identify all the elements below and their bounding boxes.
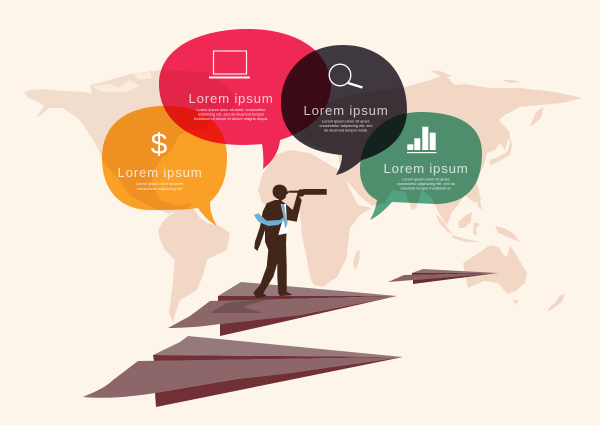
body text: orange bubble: consectetur adipiscing elit.	[137, 186, 183, 191]
icon: magnifier	[329, 64, 362, 88]
body text: red bubble: adipiscing elit, sed do eiusmod tempor	[198, 112, 265, 116]
green bubble content	[383, 127, 469, 190]
orange bubble content	[117, 128, 203, 191]
telescope	[288, 189, 327, 195]
japan and sakhalin	[490, 106, 544, 165]
red bubble content	[188, 51, 274, 121]
indonesia and philippines	[435, 196, 520, 242]
body text: orange bubble	[136, 181, 184, 191]
north america	[24, 70, 238, 214]
body text: orange bubble: Lorem ipsum dolor sit amet,	[136, 181, 184, 186]
body text: dark bubble: do eiusmod tempor incidi.	[324, 128, 368, 132]
hand	[297, 189, 305, 197]
body text: green bubble: consectetur adipiscing elit, sed do	[397, 181, 455, 186]
body text: red bubble: Lorem ipsum dolor sit amet, consectetur	[196, 107, 266, 112]
small paper plane	[388, 269, 498, 284]
bubble: red	[159, 29, 331, 169]
heading: orange bubble: Lorem ipsum	[117, 165, 203, 180]
bubble: dark	[281, 45, 407, 175]
man body	[253, 194, 302, 298]
medium paper plane	[168, 282, 397, 336]
body text: green bubble: eiusmod tempor incididunt ut.	[401, 186, 451, 190]
madagascar	[353, 250, 360, 270]
australia	[463, 245, 527, 294]
dark bubble content	[303, 64, 389, 132]
body text: red bubble	[194, 107, 268, 121]
new zealand and tasmania	[513, 294, 565, 311]
bubble: orange	[102, 106, 227, 226]
head	[273, 185, 288, 201]
south america	[158, 208, 230, 323]
body text: dark bubble	[320, 118, 372, 132]
africa	[258, 150, 372, 287]
white shirt	[278, 204, 287, 235]
bubble: green	[360, 112, 482, 220]
businessman with telescope	[253, 185, 327, 298]
blue scarf	[254, 213, 285, 226]
canadian arctic islands	[92, 72, 152, 92]
body text: dark bubble: Lorem ipsum dolor sit amet,	[322, 118, 370, 124]
blue tie	[281, 204, 287, 229]
heading: red bubble: Lorem ipsum	[188, 91, 274, 106]
icon: laptop	[209, 51, 250, 78]
body text: dark bubble: consectetur adipiscing elit, sed	[320, 123, 372, 128]
body text: green bubble: Lorem ipsum dolor sit amet,	[402, 176, 450, 182]
shadow on plane	[210, 296, 277, 313]
large paper plane	[83, 336, 403, 407]
heading: dark bubble: Lorem ipsum	[303, 103, 389, 118]
heading: green bubble: Lorem ipsum	[383, 161, 469, 176]
world map	[24, 70, 583, 323]
body text: green bubble	[397, 176, 455, 190]
icon: bar chart	[407, 127, 436, 153]
eurasia	[300, 75, 583, 225]
body text: red bubble: incididunt ut labore et dolore magna aliqua.	[194, 116, 268, 121]
arctic islands	[430, 70, 521, 83]
icon: dollar: $	[151, 128, 168, 161]
